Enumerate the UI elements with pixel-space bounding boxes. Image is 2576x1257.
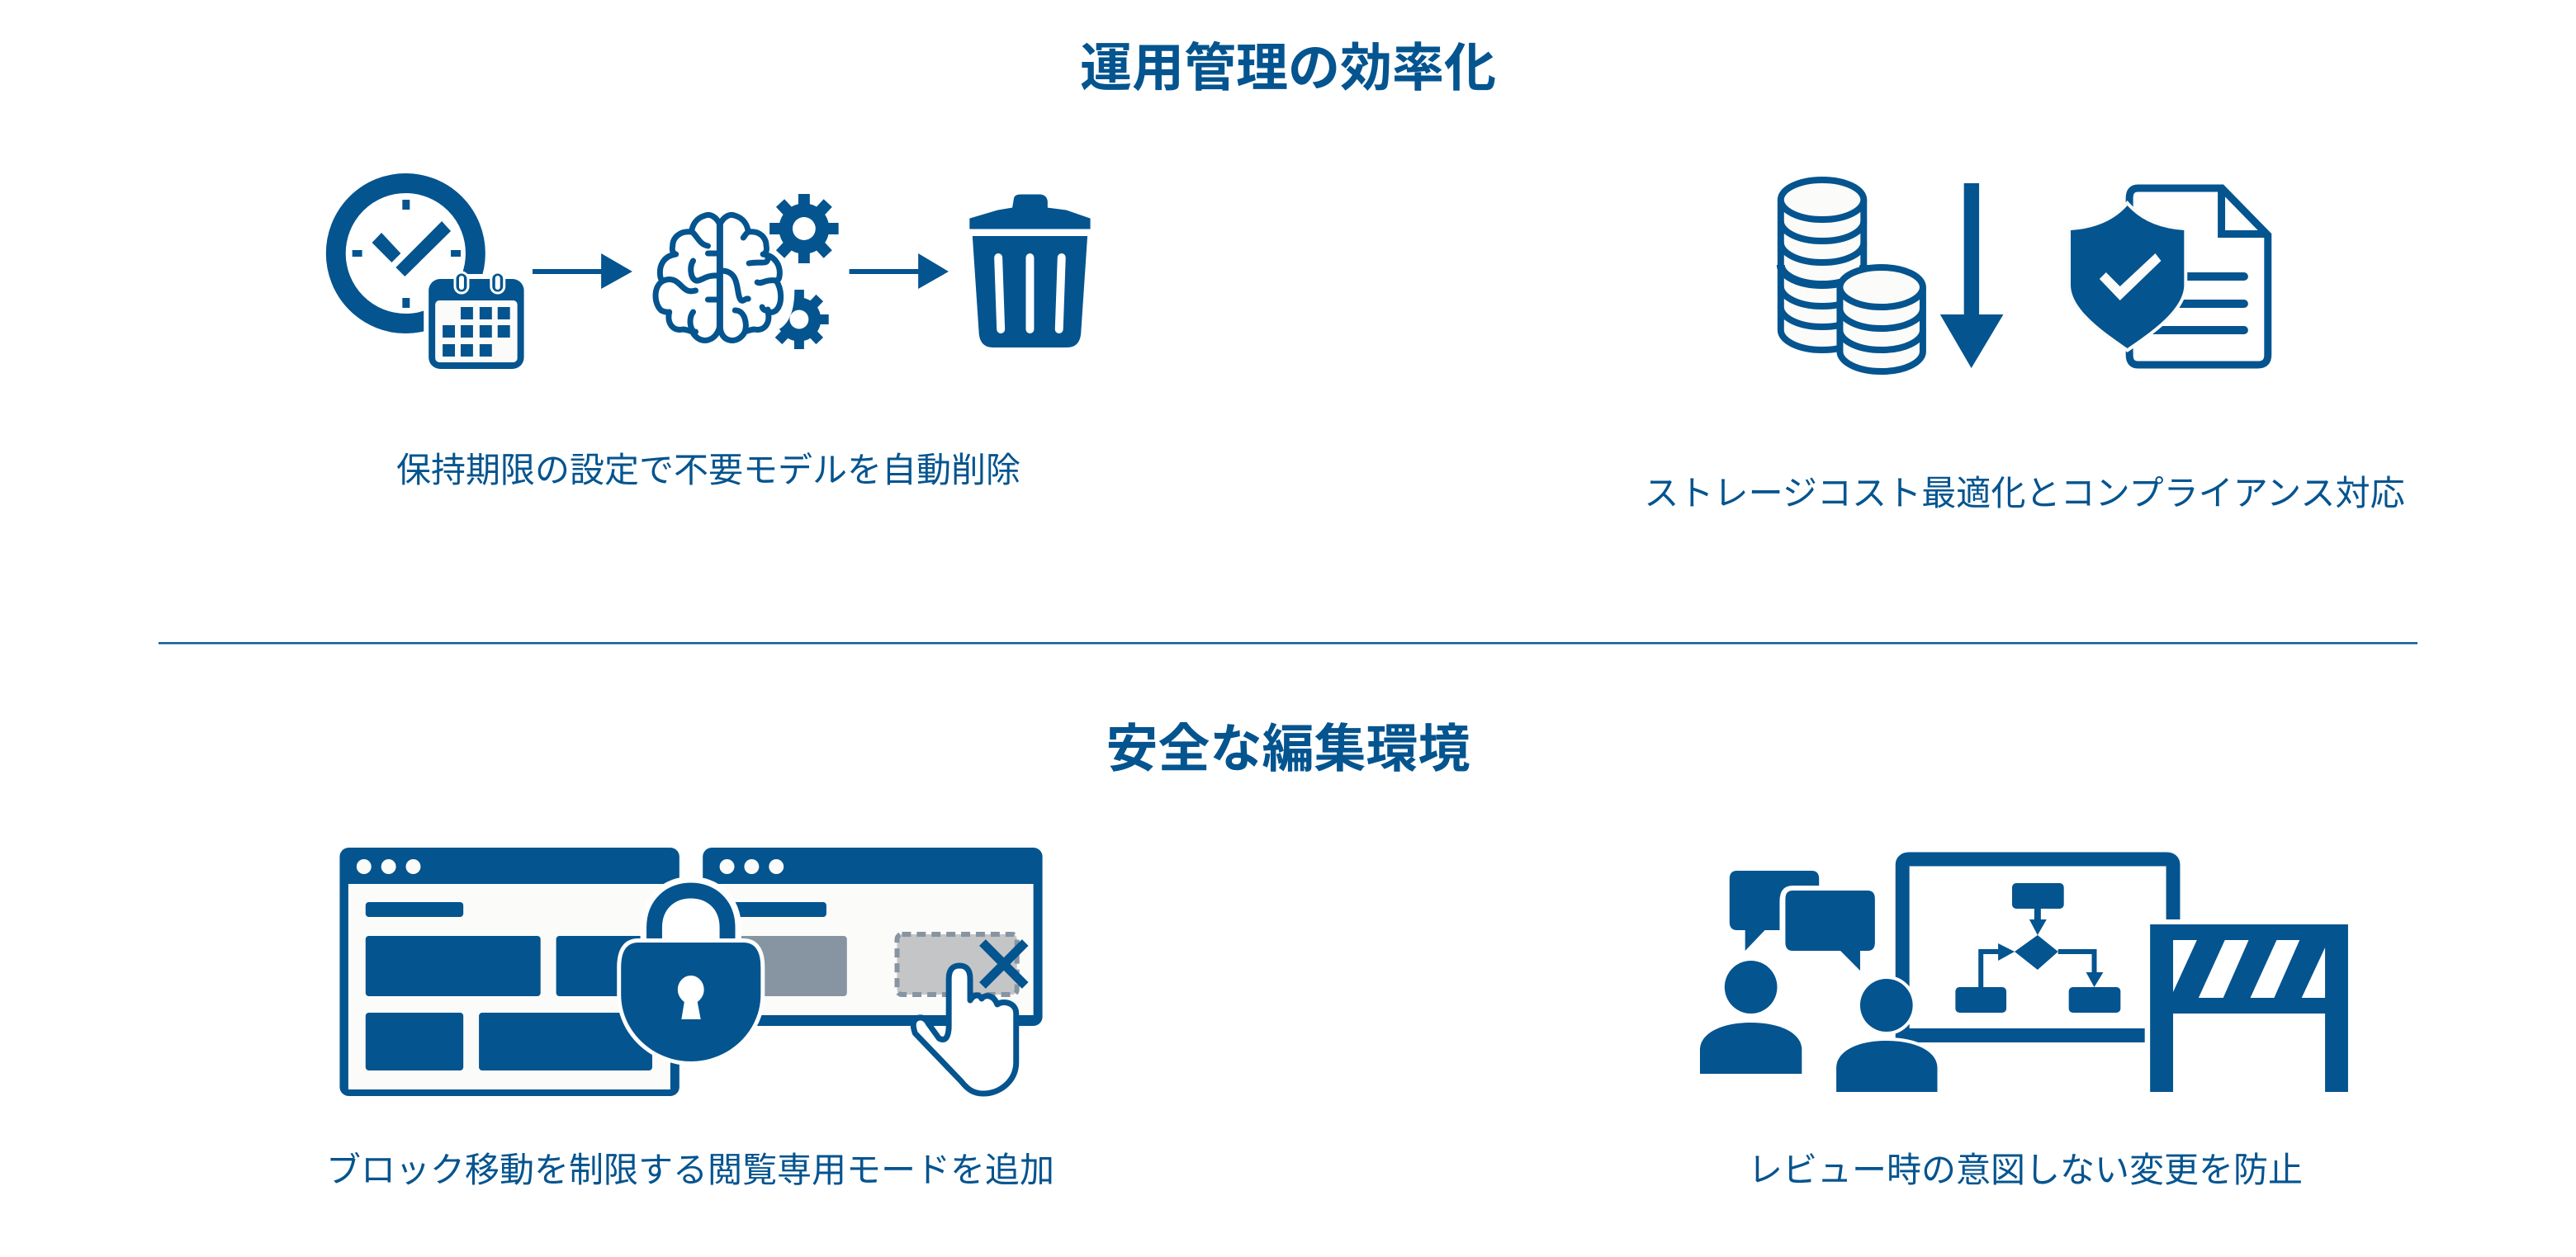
panel: read-only mode [326, 848, 1054, 1189]
icon: brain with gears [656, 194, 839, 349]
dashed drop target [897, 934, 1017, 995]
icon: person right [1836, 979, 1937, 1092]
caption: read-only mode: ブロック移動を制限する閲覧専用モードを追加 [326, 1151, 1054, 1189]
arrow: clock to brain [533, 253, 632, 289]
icon: prohibited X [983, 943, 1025, 985]
icon: clock with calendar [336, 183, 531, 373]
icon: person left [1700, 961, 1802, 1074]
panel: storage cost and compliance [1644, 180, 2405, 513]
caption: storage and compliance: ストレージコスト最適化とコンプライアンス対応 [1644, 474, 2405, 513]
icon: small gear [769, 290, 829, 349]
icon: brain outline [656, 215, 781, 341]
arrow: brain to trash [850, 253, 949, 289]
icon: large gear [769, 194, 839, 263]
heading: 運用管理の効率化: 運用管理の効率化 [1080, 40, 1496, 97]
icon: pointing hand [913, 966, 1016, 1094]
icon: down arrow [1940, 183, 2003, 368]
icon: document [2129, 188, 2268, 365]
icon group: storage and compliance [1781, 180, 2268, 371]
icon: small database stack [1840, 267, 1923, 371]
icon: striped barricade [2150, 924, 2348, 1092]
icon group: review and barricade [1700, 859, 2348, 1092]
icon: shield with check [2071, 206, 2184, 348]
icon: padlock [621, 891, 760, 1061]
icon: whiteboard frame [1902, 859, 2173, 1040]
panel: prevent accidental changes [1700, 859, 2348, 1189]
icon group: windows, lock and hand [339, 848, 1043, 1096]
caption: automatic deletion: 保持期限の設定で不要モデルを自動削除 [396, 451, 1020, 489]
icon: right browser window [703, 848, 1043, 1026]
panel: automatic deletion flow [336, 183, 1090, 489]
icon: left browser window [339, 848, 680, 1096]
icon: large database stack [1781, 180, 1863, 350]
icon: flowchart [1955, 883, 2120, 1013]
icon group: clock, brain, trash flow [336, 183, 1090, 373]
caption: prevent accidental changes: レビュー時の意図しない変更を防止 [1748, 1151, 2303, 1189]
icon: trash can [970, 195, 1090, 347]
icon: speech bubbles [1730, 871, 1875, 971]
heading: 安全な編集環境: 安全な編集環境 [1106, 721, 1470, 778]
